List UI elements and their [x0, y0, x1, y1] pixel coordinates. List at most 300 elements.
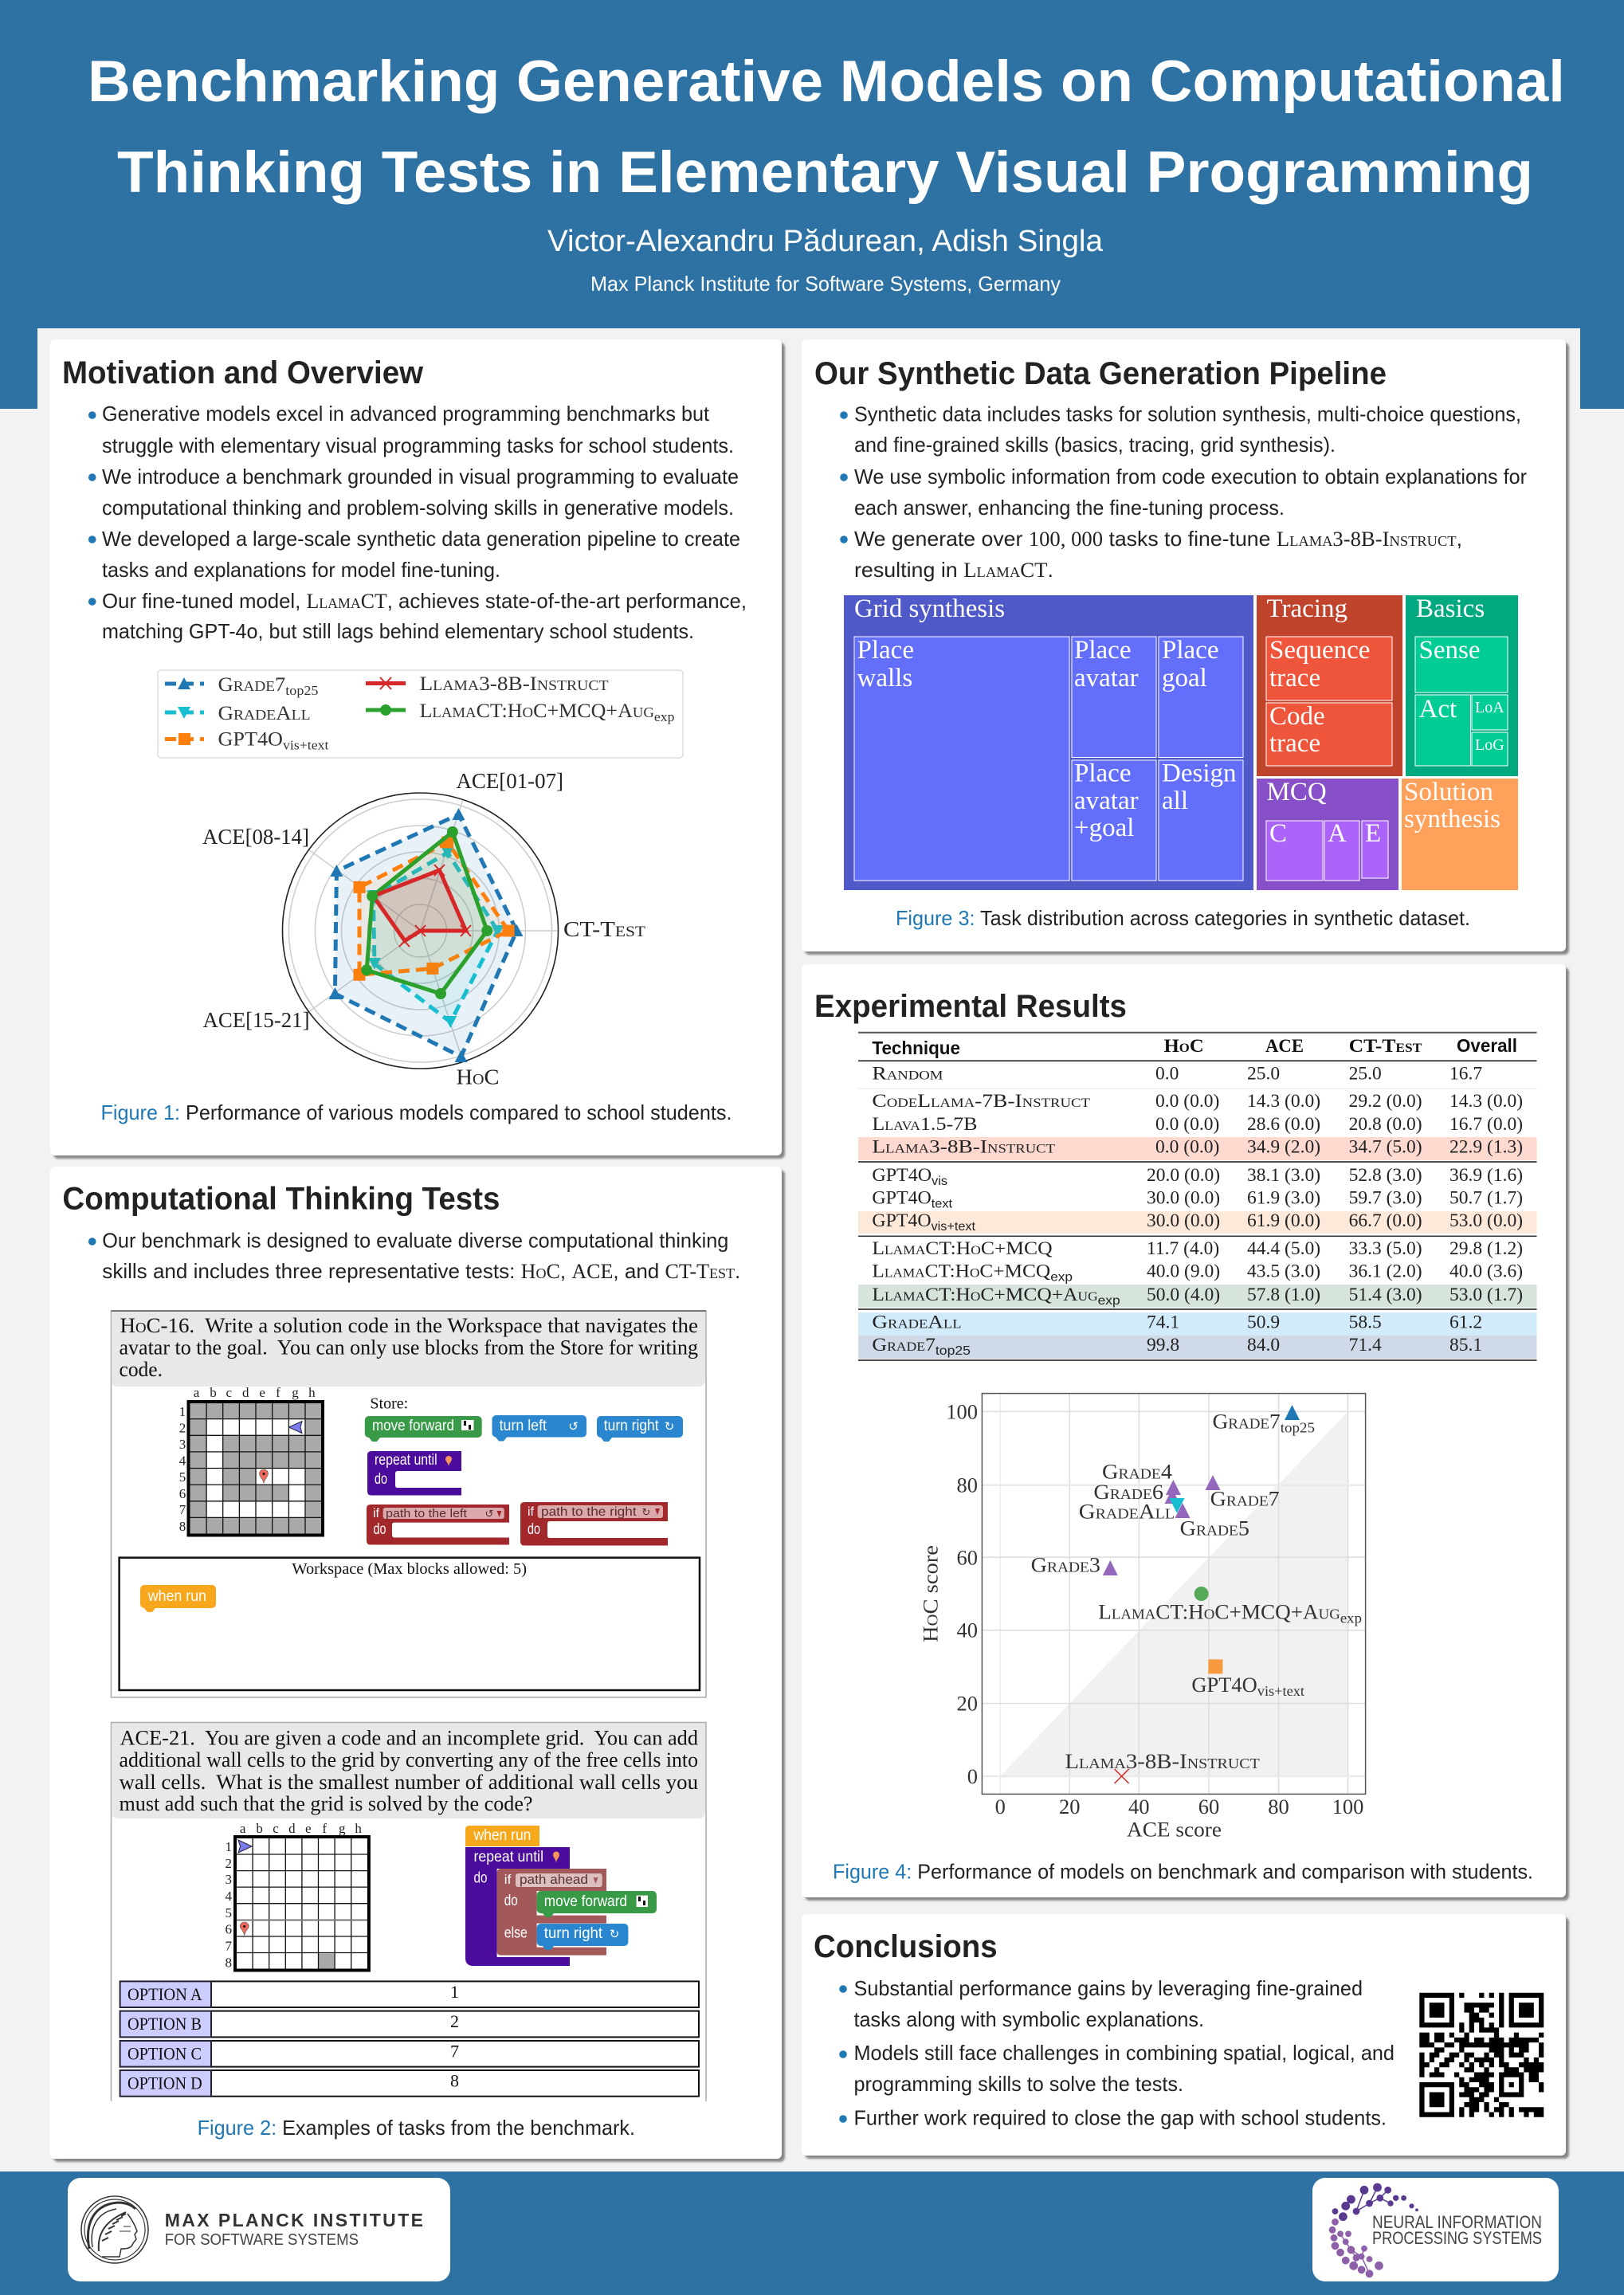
maze grid: HoC: b: [210, 1385, 217, 1400]
maze grid: HoC: 8: [179, 1519, 186, 1534]
table row labels: Grade7: [872, 1335, 930, 1355]
block: if path to the left: do: [373, 1521, 386, 1538]
caption: figure 1: Figure 1: Performance of various models compared to school students.: [100, 1100, 732, 1124]
treemap group: basics: Sense: [1418, 636, 1481, 665]
table values: 59.7 (3.0): [1349, 1188, 1422, 1209]
maze grid: HoC: a: [194, 1385, 200, 1400]
maze grid: HoC: [179, 1385, 323, 1535]
radar axis labels: [202, 769, 645, 1089]
logo: Max Planck Institute: [68, 2178, 450, 2281]
task prompt: ACE-21: wall cells. What is the smallest number of additional wall cells you: [120, 1771, 698, 1794]
maze grid: ACE: c: [273, 1821, 279, 1836]
treemap group: grid synthesis: Place: [857, 636, 914, 665]
scatter markers: [1103, 1405, 1300, 1783]
block: repeat until: repeat until: [473, 1849, 543, 1865]
block: turn right: ↻: [610, 1927, 619, 1941]
authors: Victor-Alexandru Pădurean, Adish Singla: [547, 225, 1104, 258]
table values: 0.0 (0.0): [1155, 1091, 1219, 1112]
maze grid: HoC: 1: [179, 1404, 186, 1419]
legend: radar chart: [158, 670, 683, 758]
table values: 22.9 (1.3): [1449, 1137, 1523, 1158]
maze grid: HoC: d: [242, 1385, 249, 1400]
block: turn left: [492, 1415, 586, 1441]
table values: 74.1: [1147, 1312, 1179, 1333]
scatter labels: Grade4: [1102, 1460, 1172, 1484]
treemap: task distribution: [844, 594, 1518, 890]
table values: 29.8 (1.2): [1449, 1238, 1523, 1259]
scatter axis ticks: 0: [967, 1764, 978, 1788]
block: repeat until: [367, 1451, 461, 1495]
table values: 0.0 (0.0): [1155, 1137, 1219, 1158]
treemap group: MCQ: [1257, 778, 1398, 890]
table values: 20.0 (0.0): [1147, 1165, 1220, 1186]
table values: 99.8: [1147, 1335, 1179, 1355]
table values: 30.0 (0.0): [1147, 1210, 1220, 1231]
icon: NeurIPS dot arc: [1329, 2183, 1418, 2277]
scatter axis ticks: 100: [1332, 1795, 1363, 1818]
legend: radar chart: GPT4O: [218, 728, 280, 751]
table values: 33.3 (5.0): [1349, 1238, 1422, 1259]
treemap group: grid synthesis: Grid synthesis: [854, 594, 1005, 623]
caption: figure 3: Figure 3: Task distribution across categories in synthetic dataset.: [896, 906, 1470, 930]
block: if path to the right: ↻: [642, 1507, 650, 1519]
table header: Overall: [1457, 1035, 1517, 1056]
treemap group: MCQ: E: [1365, 819, 1381, 848]
maze grid: ACE: 8: [226, 1956, 232, 1970]
table header: CT-Test: [1349, 1036, 1422, 1057]
title: Thinking Tests in Elementary Visual Programming: [117, 140, 1533, 205]
treemap group: grid synthesis: Design: [1162, 759, 1237, 787]
bullet list: pipeline: [840, 402, 1527, 582]
scatter labels: GradeAll: [1079, 1500, 1175, 1523]
maze grid: HoC: 2: [179, 1420, 186, 1436]
table row labels: GPT4O: [872, 1165, 931, 1186]
table row labels: Llava1.5-7B: [872, 1114, 977, 1135]
table values: 34.7 (5.0): [1349, 1137, 1422, 1158]
bullet list: tests intro: Our benchmark is designed to evaluate diverse computational thinking: [102, 1229, 728, 1253]
heading: experimental results: Experimental Results: [814, 989, 1127, 1024]
task prompt: ACE-21: [112, 1723, 705, 1818]
maze grid: HoC: 5: [179, 1469, 186, 1485]
block: when run: [465, 1826, 539, 1846]
maze grid: ACE: 4: [226, 1889, 233, 1904]
panel: computational thinking tests: [50, 1167, 785, 2162]
table values: 25.0: [1247, 1063, 1280, 1084]
table values: 34.9 (2.0): [1247, 1137, 1320, 1158]
affiliation: Max Planck Institute for Software Systems, Germany: [590, 272, 1061, 296]
legend: radar chart: Llama3-8B-Instruct: [419, 673, 609, 695]
bullet list: motivation: We developed a large-scale synthetic data generation pipeline to create: [102, 527, 740, 551]
answer options: OPTION A: [127, 1984, 202, 2004]
maze grid: ACE: a: [240, 1821, 246, 1836]
bullet list: motivation: Our fine-tuned model, LlamaCT, achieves state-of-the-art performance,: [102, 589, 747, 613]
answer options: 7: [450, 2042, 459, 2061]
header band: [0, 0, 1624, 409]
table values: 36.9 (1.6): [1449, 1165, 1523, 1186]
table values: 53.0 (0.0): [1449, 1210, 1523, 1231]
scatter axis ticks: 80: [1268, 1795, 1289, 1818]
treemap group: grid synthesis: Place: [1074, 759, 1131, 787]
scatter axis ticks: 80: [956, 1473, 978, 1497]
legend: radar chart: top25: [285, 683, 319, 698]
table values: 85.1: [1449, 1335, 1482, 1355]
block: if path to the right: [520, 1502, 668, 1546]
scatter axis ticks: 40: [1128, 1795, 1150, 1818]
block: if path to the right: if: [528, 1505, 535, 1519]
block: move forward: move forward: [372, 1418, 454, 1434]
legend: radar chart: Grade7: [218, 674, 281, 696]
table values: 16.7 (0.0): [1449, 1114, 1523, 1135]
bullet list: motivation: matching GPT-4o, but still lags behind elementary school students.: [102, 619, 694, 643]
radar axis labels: ACE[15-21]: [202, 1008, 309, 1032]
scatter axis ticks: 20: [956, 1692, 978, 1716]
block: if path to the left: path to the left: [386, 1507, 468, 1520]
answer options: OPTION D: [127, 2073, 202, 2093]
radar axis labels: ACE[01-07]: [456, 769, 563, 793]
block: turn left: ↺: [568, 1419, 579, 1434]
table row labels: Llama3-8B-Instruct: [872, 1137, 1055, 1158]
bullet list: conclusions: Models still face challenges in combining spatial, logical, and: [854, 2041, 1395, 2065]
scatter plot: [918, 1394, 1366, 1841]
scatter axis ticks: 60: [1198, 1795, 1219, 1818]
footer band: [0, 2171, 1624, 2295]
scatter axis ticks: 40: [956, 1618, 978, 1642]
treemap group: basics: Basics: [1416, 594, 1485, 623]
treemap group: tracing: [1257, 594, 1402, 776]
bullet list: pipeline: We use symbolic information from code execution to obtain explanations for: [854, 465, 1527, 488]
legend: radar chart: vis+text: [283, 738, 329, 752]
table row labels: LlamaCT:HoC+MCQ: [872, 1238, 1053, 1259]
x axis title: ACE score: [1127, 1817, 1222, 1841]
maze grid: HoC: e: [259, 1385, 265, 1400]
maze grid: ACE: h: [355, 1821, 362, 1836]
table values: 44.4 (5.0): [1247, 1238, 1320, 1259]
scatter labels: [1031, 1410, 1362, 1773]
table values: 58.5: [1349, 1312, 1382, 1333]
panel: motivation and overview: [50, 339, 785, 1159]
treemap group: tracing: Code: [1269, 702, 1325, 731]
block: if path to the right: path to the right: [541, 1505, 637, 1519]
title: Benchmarking Generative Models on Computational: [88, 49, 1565, 114]
scatter axis ticks: 60: [956, 1545, 978, 1569]
task prompt: ACE-21: must add such that the grid is solved by the code?: [120, 1792, 532, 1815]
bullet list: pipeline: Synthetic data includes tasks for solution synthesis, multi-choice questions,: [854, 402, 1521, 426]
y axis title: HoC score: [918, 1545, 942, 1642]
block: if else: [497, 1869, 606, 1956]
title: [88, 49, 1565, 205]
scatter axis ticks: [946, 1399, 1363, 1818]
maze grid: HoC: 6: [179, 1486, 186, 1501]
maze grid: ACE: 6: [226, 1921, 232, 1936]
maze grid: ACE: d: [288, 1821, 296, 1836]
bullet list: conclusions: programming skills to solve the tests.: [854, 2072, 1183, 2096]
treemap group: MCQ: C: [1269, 819, 1287, 848]
logo: NeurIPS: NEURAL INFORMATION: [1372, 2212, 1542, 2232]
treemap group: solution synthesis: Solution: [1404, 778, 1493, 806]
block: repeat until: [465, 1847, 570, 1966]
block: if else: do: [504, 1893, 518, 1909]
table values: 71.4: [1349, 1335, 1382, 1355]
bullet list: conclusions: [839, 1976, 1395, 2130]
treemap group: basics: LoA: [1475, 699, 1504, 716]
table header: [872, 1035, 1517, 1058]
block: turn right: turn right: [604, 1418, 659, 1434]
scatter axis ticks: 20: [1059, 1795, 1081, 1818]
block: repeat until: repeat until: [375, 1452, 437, 1469]
block: repeat until: do: [375, 1471, 387, 1488]
workspace box: Workspace (Max blocks allowed: 5): [292, 1560, 527, 1578]
bullet list: pipeline: resulting in LlamaCT.: [854, 558, 1053, 582]
table values: 61.2: [1449, 1312, 1482, 1333]
task card: ACE-21: [112, 1723, 706, 2101]
maze grid: HoC: g: [292, 1385, 299, 1400]
block: if path to the right: do: [528, 1521, 540, 1538]
logo: NeurIPS: PROCESSING SYSTEMS: [1372, 2228, 1542, 2248]
bullet list: motivation: We introduce a benchmark grounded in visual programming to evaluate: [102, 465, 739, 488]
table row labels: text: [932, 1198, 953, 1211]
bullet list: motivation: computational thinking and problem-solving skills in generative models.: [102, 496, 734, 520]
task prompt: HoC-16: HoC-16. Write a solution code in the Workspace that navigates the: [120, 1314, 698, 1337]
answer options: OPTION C: [127, 2043, 202, 2064]
block: if else: path ahead: [520, 1872, 588, 1887]
table values: 40.0 (9.0): [1147, 1261, 1220, 1282]
treemap group: grid synthesis: Place: [1074, 636, 1131, 665]
bullet list: motivation: Generative models excel in advanced programming benchmarks but: [102, 402, 710, 426]
legend: radar chart: LlamaCT:HoC+MCQ+Aug: [419, 700, 645, 722]
heading: computational thinking tests: Computational Thinking Tests: [62, 1182, 500, 1217]
bullet list: pipeline: and fine-grained skills (basics, tracing, grid synthesis).: [854, 433, 1336, 457]
block: move forward: [537, 1891, 657, 1917]
radar chart: [202, 769, 645, 1089]
table values: 61.9 (0.0): [1247, 1210, 1320, 1231]
table values: 66.7 (0.0): [1349, 1210, 1422, 1231]
answer options: 2: [450, 2011, 459, 2031]
table values: 57.8 (1.0): [1247, 1285, 1320, 1305]
legend: radar chart: GradeAll: [218, 703, 311, 724]
radar axis labels: CT-Test: [563, 917, 645, 941]
block: move forward: [365, 1416, 482, 1442]
maze grid: ACE: b: [256, 1821, 263, 1836]
scatter labels: vis+text: [1257, 1683, 1304, 1699]
block: turn right: [537, 1924, 628, 1950]
block: if else: else: [504, 1924, 528, 1941]
treemap group: grid synthesis: avatar: [1074, 664, 1139, 692]
heading: pipeline: Our Synthetic Data Generation Pipeline: [814, 356, 1387, 391]
workspace box: [120, 1558, 700, 1690]
block: turn right: ↻: [665, 1419, 674, 1434]
heading: conclusions: Conclusions: [814, 1929, 998, 1964]
treemap group: tracing: Tracing: [1267, 594, 1347, 623]
table values: 50.7 (1.7): [1449, 1188, 1523, 1209]
store label: Store:: [370, 1395, 408, 1413]
maze grid: ACE: f: [322, 1821, 327, 1836]
series: GradeAll: [367, 847, 504, 1028]
legend: radar chart: exp: [654, 709, 674, 724]
scatter labels: Grade5: [1180, 1517, 1249, 1540]
table values: 50.0 (4.0): [1147, 1285, 1220, 1305]
table row labels: GPT4O: [872, 1210, 931, 1231]
scatter labels: top25: [1281, 1420, 1315, 1436]
block: if path to the left: ↺: [485, 1508, 493, 1520]
results table: [858, 1033, 1536, 1360]
block: repeat until: do: [473, 1869, 488, 1887]
workspace box: when run: [147, 1588, 206, 1605]
answer options: OPTION B: [127, 2014, 202, 2034]
scatter axis ticks: 100: [946, 1399, 978, 1423]
table values: 84.0: [1247, 1335, 1280, 1355]
bullet list: motivation: tasks and explanations for model fine-tuning.: [102, 558, 500, 582]
icon: Minerva seal: [81, 2196, 148, 2263]
table row labels: top25: [936, 1344, 971, 1358]
panel: conclusions: [802, 1914, 1569, 2159]
table values: 14.3 (0.0): [1247, 1091, 1320, 1112]
maze grid: ACE: [226, 1821, 369, 1970]
table values: 0.0: [1155, 1063, 1179, 1084]
marker overlay: LlamaCT at ACE[08-14]: [367, 891, 378, 902]
treemap group: tracing: trace: [1269, 729, 1320, 758]
treemap group: basics: LoG: [1475, 736, 1504, 754]
bullet list: tests intro: skills and includes three representative tests: HoC, ACE, and CT-Test.: [102, 1259, 740, 1283]
block: when run: when run: [473, 1827, 531, 1844]
table row labels: exp: [1050, 1271, 1073, 1285]
table values: 38.1 (3.0): [1247, 1165, 1320, 1186]
maze grid: HoC: h: [308, 1385, 316, 1400]
bullet list: pipeline: each answer, enhancing the fine-tuning process.: [854, 496, 1285, 520]
scatter labels: Llama3-8B-Instruct: [1065, 1750, 1260, 1773]
panel: synthetic data pipeline: [802, 339, 1569, 955]
panel: experimental results: [802, 964, 1569, 1901]
bullet list: tests intro: [88, 1229, 740, 1283]
table values: 11.7 (4.0): [1147, 1238, 1219, 1259]
heading: motivation: Motivation and Overview: [62, 355, 424, 390]
table row labels: [872, 1063, 1120, 1358]
table values: 29.2 (0.0): [1349, 1091, 1422, 1112]
maze grid: ACE: 5: [226, 1905, 232, 1920]
table row labels: LlamaCT:HoC+MCQ+Aug: [872, 1285, 1081, 1305]
table values: [1147, 1063, 1523, 1355]
table header: HoC: [1164, 1036, 1204, 1057]
scatter labels: exp: [1340, 1610, 1362, 1626]
treemap group: tracing: trace: [1269, 664, 1320, 692]
treemap group: solution synthesis: [1402, 778, 1518, 890]
block: if path to the left: if: [373, 1507, 380, 1520]
series: Llama3: [373, 865, 471, 947]
treemap group: MCQ: MCQ: [1267, 778, 1327, 806]
block: turn right: [597, 1416, 683, 1442]
scatter labels: Grade3: [1031, 1554, 1100, 1577]
table values: 40.0 (3.6): [1449, 1261, 1523, 1282]
bullet list: conclusions: tasks along with symbolic explanations.: [854, 2007, 1204, 2031]
table row labels: vis: [932, 1175, 947, 1188]
table values: 20.8 (0.0): [1349, 1114, 1422, 1135]
task prompt: HoC-16: avatar to the goal. You can only use blocks from the Store for writing: [120, 1336, 698, 1359]
series: LlamaCT: [361, 826, 492, 999]
radar axis labels: ACE[08-14]: [202, 825, 309, 849]
logo: Max Planck Institute: FOR SOFTWARE SYSTEMS: [165, 2231, 359, 2249]
table values: 14.3 (0.0): [1449, 1091, 1523, 1112]
maze grid: HoC: 4: [179, 1454, 186, 1469]
scatter labels: GPT4O: [1191, 1673, 1256, 1697]
maze grid: HoC: 7: [179, 1502, 186, 1517]
block: if else: if: [504, 1872, 512, 1887]
maze grid: ACE: 1: [226, 1839, 232, 1854]
scatter labels: LlamaCT:HoC+MCQ+Aug: [1098, 1600, 1330, 1623]
table values: 43.5 (3.0): [1247, 1261, 1320, 1282]
scatter axis ticks: 0: [995, 1795, 1006, 1818]
maze grid: ACE: g: [339, 1821, 346, 1836]
treemap group: basics: Act: [1418, 695, 1457, 724]
block: move forward: move forward: [544, 1893, 627, 1910]
table values: 16.7: [1449, 1063, 1482, 1084]
block: if path to the left: [367, 1504, 509, 1544]
table row labels: GradeAll: [872, 1312, 961, 1333]
treemap group: grid synthesis: walls: [857, 664, 912, 692]
bullet list: conclusions: Substantial performance gains by leveraging fine-grained: [854, 1976, 1363, 2000]
table header: ACE: [1265, 1036, 1304, 1057]
bullet list: motivation: struggle with elementary visual programming tasks for school students.: [102, 434, 734, 457]
table row labels: vis+text: [932, 1220, 976, 1234]
table values: 36.1 (2.0): [1349, 1261, 1422, 1282]
series: Grade7 top25: [328, 808, 523, 1062]
table header: Technique: [872, 1038, 960, 1058]
table values: 51.4 (3.0): [1349, 1285, 1422, 1305]
radar axis labels: HoC: [456, 1065, 499, 1089]
table row labels: LlamaCT:HoC+MCQ: [872, 1261, 1038, 1282]
table row labels: Random: [872, 1063, 943, 1084]
bullet list: pipeline: We generate over 100, 000 tasks to fine-tune Llama3-8B-Instruct,: [854, 527, 1462, 551]
maze grid: ACE: e: [305, 1821, 312, 1836]
treemap group: MCQ: A: [1328, 819, 1347, 848]
maze grid: HoC: c: [226, 1385, 233, 1400]
table values: 61.9 (3.0): [1247, 1188, 1320, 1209]
scatter labels: Grade7: [1210, 1487, 1280, 1510]
scatter labels: Grade6: [1093, 1481, 1163, 1504]
block: turn left: turn left: [500, 1418, 547, 1434]
logo: Max Planck Institute: MAX PLANCK INSTITUTE: [165, 2210, 423, 2230]
maze grid: ACE: 2: [226, 1856, 232, 1871]
bullet list: motivation: [88, 402, 747, 643]
block: turn right: turn right: [544, 1925, 603, 1942]
logo: NeurIPS: [1312, 2178, 1559, 2281]
caption: figure 4: Figure 4: Performance of models on benchmark and comparison with students.: [833, 1860, 1533, 1884]
code blocks: ACE: [465, 1826, 657, 1966]
maze grid: HoC: 3: [179, 1437, 186, 1452]
answer options: 8: [450, 2070, 459, 2091]
bullet list: conclusions: Further work required to close the gap with school students.: [854, 2106, 1387, 2130]
QR code: [1419, 1993, 1544, 2117]
task card: HoC-16: [112, 1311, 706, 1697]
task prompt: ACE-21: additional wall cells to the grid by converting any of the free cells into: [120, 1748, 698, 1771]
answer options: 1: [450, 1982, 459, 2002]
table values: 0.0 (0.0): [1155, 1114, 1219, 1135]
answer options: [120, 1981, 699, 2097]
table row labels: GPT4O: [872, 1188, 931, 1209]
table row labels: CodeLlama-7B-Instruct: [872, 1091, 1090, 1112]
treemap group: grid synthesis: goal: [1162, 664, 1207, 692]
series: GPT4o vis+text: [354, 837, 515, 981]
table row labels: exp: [1098, 1294, 1120, 1308]
treemap group: grid synthesis: Place: [1162, 636, 1218, 665]
maze grid: ACE: 3: [226, 1872, 232, 1887]
table values: 28.6 (0.0): [1247, 1114, 1320, 1135]
treemap group: grid synthesis: +goal: [1074, 814, 1134, 842]
caption: figure 2: Figure 2: Examples of tasks from the benchmark.: [198, 2116, 635, 2140]
task prompt: HoC-16: code.: [120, 1358, 163, 1381]
table values: 25.0: [1349, 1063, 1382, 1084]
task prompt: HoC-16: [112, 1312, 705, 1387]
table values: 52.8 (3.0): [1349, 1165, 1422, 1186]
treemap group: grid synthesis: [844, 594, 1253, 890]
